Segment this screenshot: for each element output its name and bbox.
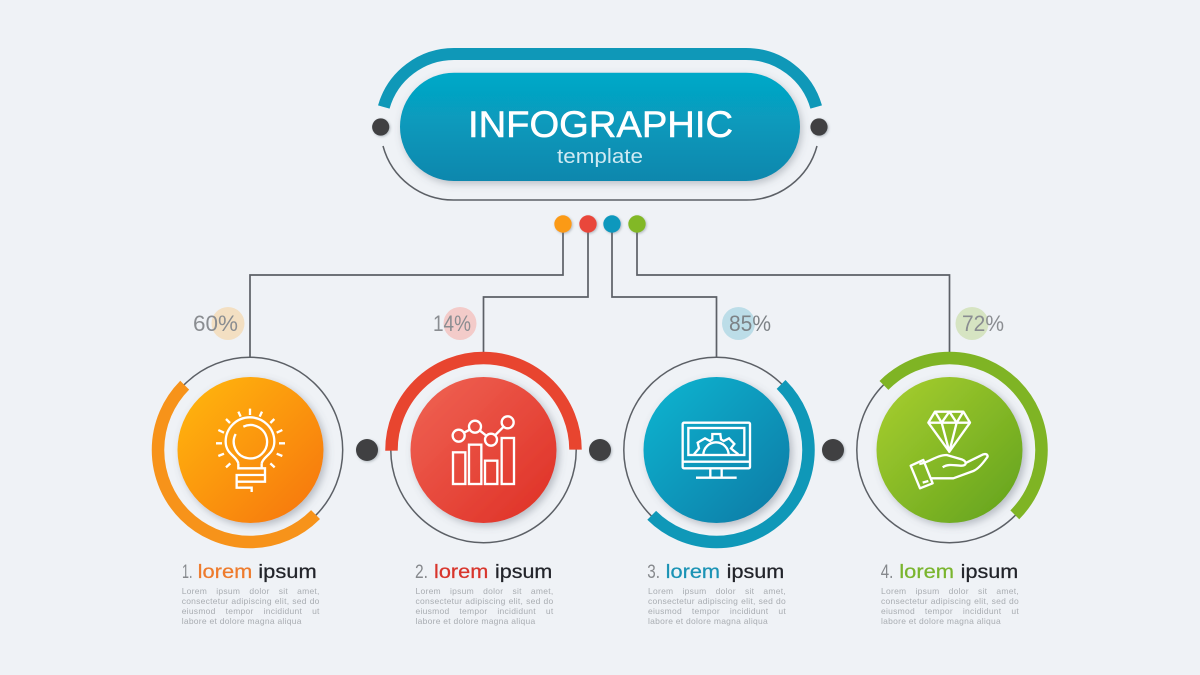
label 3: ipsum (727, 562, 784, 583)
percent value 4: 72% (962, 311, 1004, 336)
main circle 2 (410, 377, 556, 523)
label 3: 3. (647, 562, 660, 583)
body text 1: consectetur adipiscing elit, sed do (182, 596, 320, 606)
main circle 4 (876, 377, 1022, 523)
body text 1: labore et dolore magna aliqua (182, 616, 302, 626)
percent bubble 4 (956, 307, 988, 340)
main circle 3 (644, 377, 790, 523)
icon: monitor with gear (683, 423, 750, 478)
progress arc 1 (120, 320, 380, 580)
right dark dot 1 (356, 439, 378, 461)
right dark dot 2 (589, 439, 611, 461)
right connector dot (810, 118, 828, 136)
label 4: ipsum (961, 562, 1018, 583)
colored dots row (554, 215, 646, 233)
label 3: lorem (666, 562, 720, 583)
main circle 1 (178, 377, 324, 523)
label 4: 4. (881, 562, 893, 583)
body text 4 (881, 586, 1019, 626)
panel 2: 14% chart (391, 307, 576, 543)
subtitle text: template (557, 146, 643, 168)
percent bubble 3 (722, 307, 755, 340)
label 2: ipsum (495, 562, 552, 583)
percent value 3: 85% (729, 311, 771, 336)
body text 1 (182, 586, 320, 626)
progress arc 4 (819, 320, 1080, 580)
left connector dot (372, 118, 389, 136)
percent bubble 1 (212, 307, 244, 340)
label 1: 1. (182, 562, 192, 583)
connector lines from colored dots to circles (250, 224, 950, 358)
label 2 (415, 562, 552, 583)
panel 4: 72% diamond (819, 307, 1080, 580)
right dark dot 3 (822, 439, 844, 461)
body text 3: Lorem ipsum dolor sit amet, (648, 586, 786, 596)
body text 4: eiusmod tempor incididunt ut (881, 606, 1019, 616)
body text 4: Lorem ipsum dolor sit amet, (881, 586, 1019, 596)
label 4: lorem (899, 562, 954, 583)
thick teal top arc (384, 54, 816, 107)
body text 3: eiusmod tempor incididunt ut (648, 606, 786, 616)
thin ring 1 (157, 357, 343, 543)
thin ring 2 (391, 357, 576, 543)
body text 3: consectetur adipiscing elit, sed do (648, 596, 786, 606)
panel 1: 60% idea (120, 307, 380, 580)
progress arc 3 (586, 320, 847, 580)
label 4 (881, 562, 1018, 583)
body text 3: labore et dolore magna aliqua (648, 616, 768, 626)
label 1: lorem (198, 562, 252, 583)
header: title pill with frame (372, 54, 828, 200)
thin ring 4 (857, 357, 1042, 543)
body text 2: consectetur adipiscing elit, sed do (416, 596, 554, 606)
label 3 (647, 562, 784, 583)
body text 2: labore et dolore magna aliqua (416, 616, 536, 626)
percent value 2: 14% (433, 311, 471, 336)
panel 3: 85% monitor (586, 307, 847, 580)
label 2: 2. (415, 562, 428, 583)
progress arc 2 (392, 358, 576, 542)
thin ring 3 (624, 357, 809, 543)
body text 4: consectetur adipiscing elit, sed do (881, 596, 1019, 606)
icon: light bulb (216, 409, 285, 492)
body text 4: labore et dolore magna aliqua (881, 616, 1001, 626)
label 1 (182, 562, 317, 583)
icon: hand holding diamond (911, 412, 988, 488)
body text 2: Lorem ipsum dolor sit amet, (416, 586, 554, 596)
body text 3 (648, 586, 786, 626)
label 1: ipsum (258, 562, 317, 583)
title pill (400, 73, 800, 181)
icon: bar chart (453, 416, 514, 484)
thin lower arc (383, 146, 817, 200)
body text 1: eiusmod tempor incididunt ut (182, 606, 320, 616)
percent value 1: 60% (193, 311, 238, 336)
body text 2 (416, 586, 554, 626)
body text 1: Lorem ipsum dolor sit amet, (182, 586, 320, 596)
body text 2: eiusmod tempor incididunt ut (416, 606, 554, 616)
percent bubble 2 (444, 307, 476, 340)
label 2: lorem (434, 562, 488, 583)
title text: INFOGRAPHIC (468, 103, 733, 145)
